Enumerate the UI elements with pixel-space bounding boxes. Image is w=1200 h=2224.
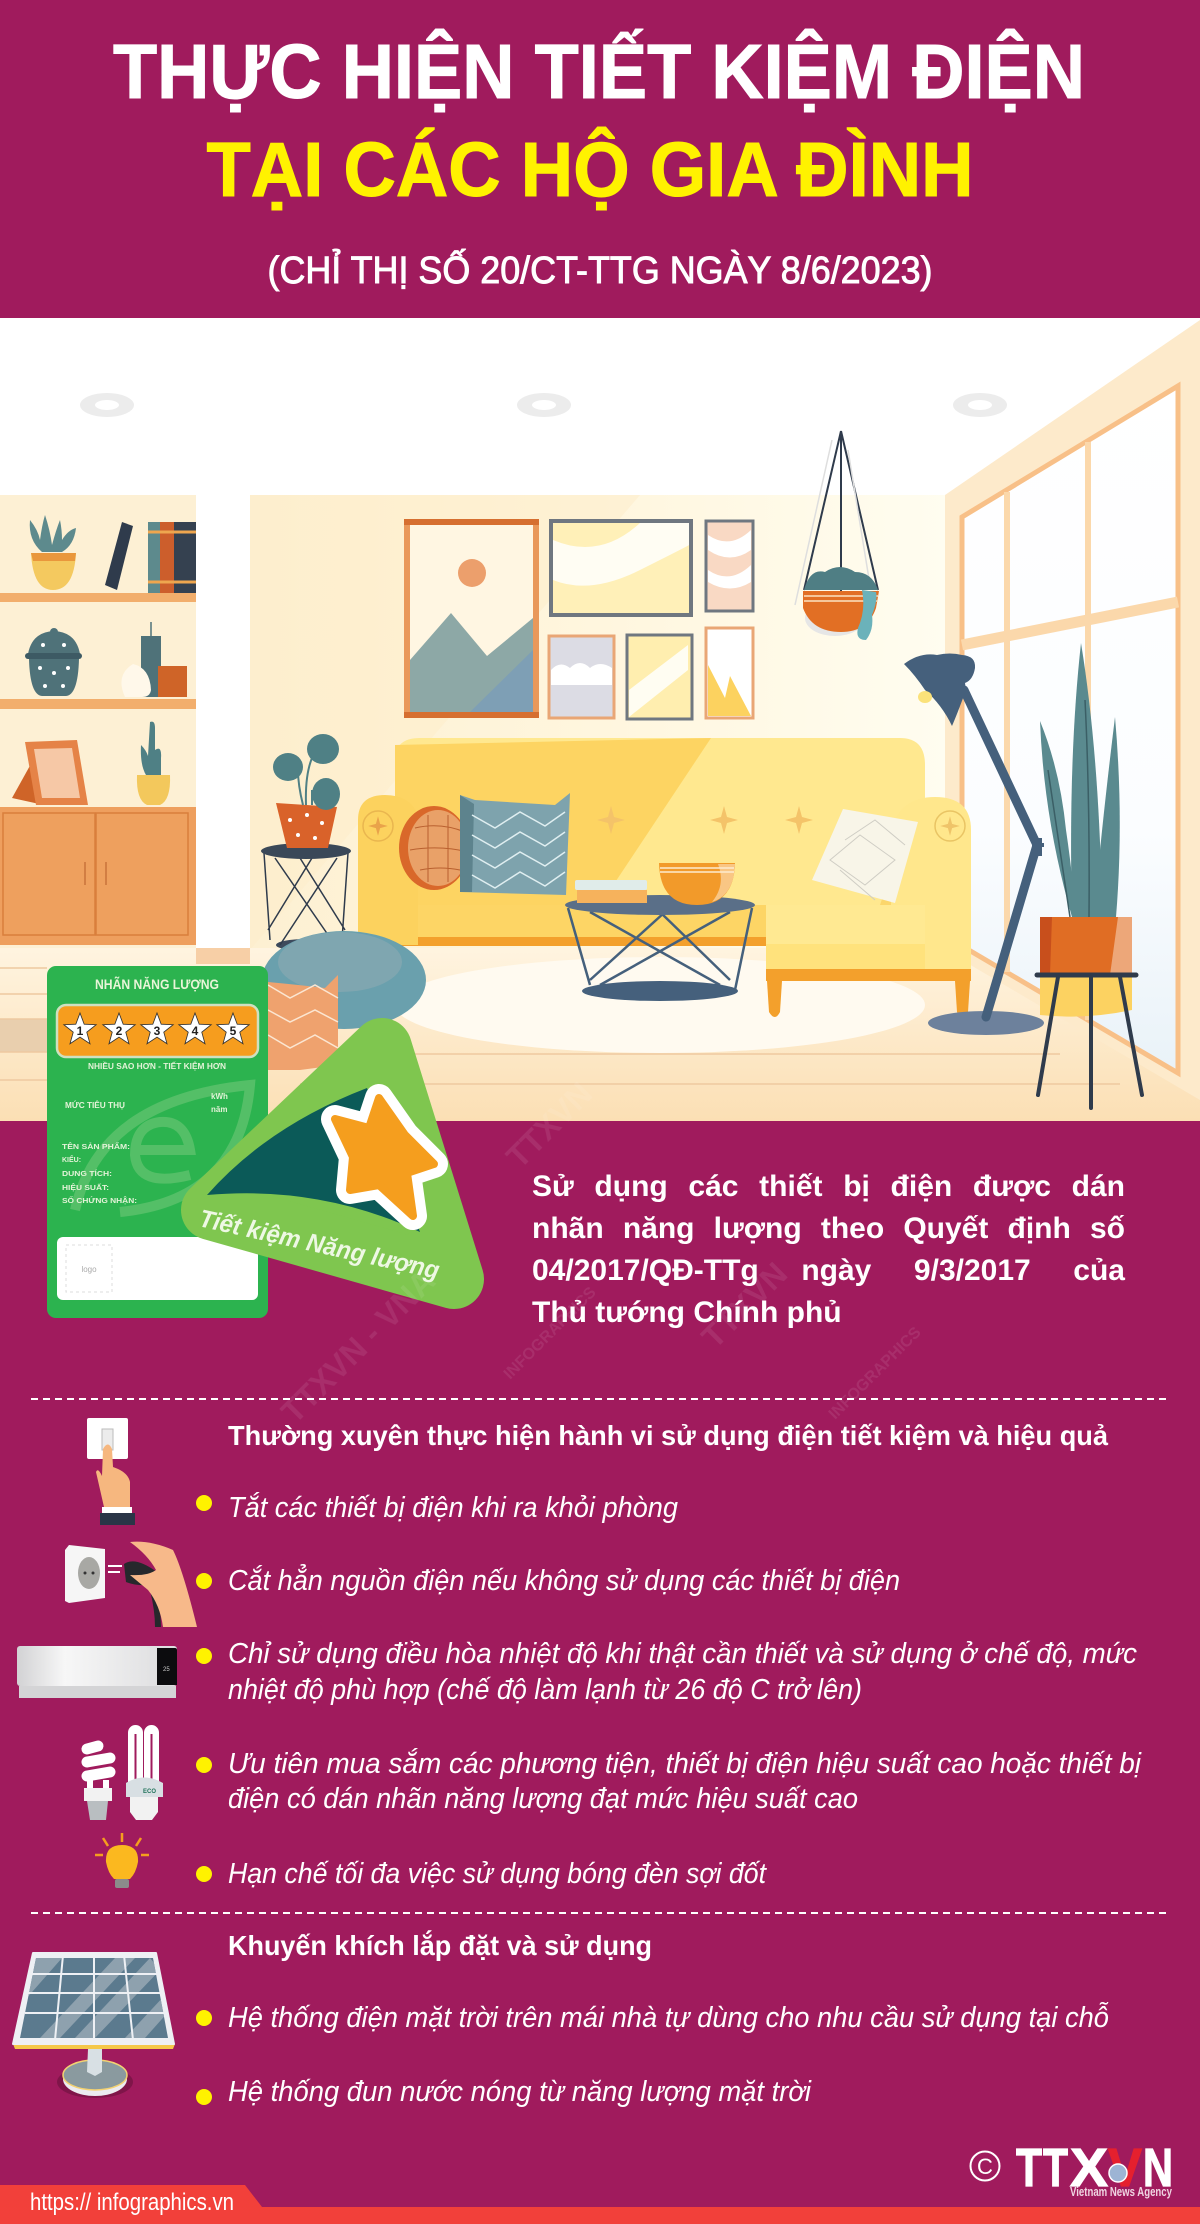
watermarks: TTXVN [499, 1075, 599, 1175]
plant pot [276, 803, 337, 848]
e logo watermark [75, 1085, 250, 1212]
cactus [137, 722, 170, 805]
TTXVN logo: N [1143, 2138, 1173, 2198]
star rating bar: 1 [77, 1024, 84, 1038]
TTXVN logo: T [1016, 2138, 1042, 2198]
label details: DUNG TÍCH: [62, 1169, 112, 1178]
swoosh [207, 1088, 420, 1232]
title line 1: THỰC HIỆN TIẾT KIỆM ĐIỆN [113, 28, 1085, 115]
plant leaves [1040, 643, 1120, 917]
cabinet [0, 807, 196, 945]
label details: NHIỀU SAO HƠN - TIẾT KIỆM HƠN [88, 1061, 226, 1071]
rug [395, 957, 925, 1053]
item: Tắt các thiết bị điện khi ra khỏi phòng [228, 1491, 678, 1524]
candles and vase [121, 622, 187, 697]
bullet list [196, 1491, 1142, 1890]
label details: KIỂU: [62, 1155, 81, 1164]
section one [17, 1399, 1168, 1890]
energy label paragraph: Sử dụng các thiết bị điện được dán [532, 1170, 1125, 1203]
agency name: Vietnam News Agency [1070, 2185, 1172, 2199]
books [575, 880, 647, 903]
icon: incandescent bulb [95, 1833, 149, 1888]
label details [62, 1061, 228, 1205]
sofa chaise [766, 797, 971, 1017]
item: Hệ thống điện mặt trời trên mái nhà tự dùng cho nhu cầu sử dụng tại chỗ [228, 2001, 1109, 2034]
white pillow [812, 809, 918, 903]
copyright and logo [970, 2138, 1173, 2199]
star rating bar: 5 [230, 1024, 237, 1038]
item: Chỉ sử dụng điều hòa nhiệt độ khi thật cần thiết và sử dụng ở chế độ, mức [228, 1638, 1137, 1670]
watermarks: TTXVN [694, 1255, 794, 1355]
item: Hạn chế tối đa việc sử dụng bóng đèn sợi đốt [228, 1858, 768, 1890]
label details: năm [211, 1105, 227, 1114]
bullet list [196, 2001, 1109, 2108]
item [196, 1747, 1142, 1815]
copyright symbol [970, 2152, 1000, 2180]
url: https:// infographics.vn [30, 2189, 234, 2216]
watermarks: TTXVN - VNA [274, 1262, 442, 1430]
icon: socket and plug [65, 1542, 197, 1627]
bookshelf [0, 495, 250, 964]
pouf and pillow [262, 931, 426, 1070]
watermarks: INFOGRAPHICS [501, 1284, 600, 1383]
energy label paragraph [532, 1170, 1126, 1329]
right wall and window [945, 320, 1200, 1100]
label details: kWh [211, 1092, 228, 1101]
picture: abstract yellow [551, 521, 691, 615]
header panel [0, 0, 1200, 318]
picture: diagonal stripes [627, 635, 692, 719]
badge text: Tiết kiệm Năng lượng [197, 1205, 442, 1285]
icon: air conditioner: 25 [163, 1667, 170, 1673]
TTXVN logo: T [1043, 2138, 1068, 2198]
title line 2: TẠI CÁC HỘ GIA ĐÌNH [206, 126, 974, 213]
logo box: logo [81, 1265, 97, 1274]
item: điện có dán nhãn năng lượng đạt mức hiệu suất cao [228, 1783, 858, 1815]
item: Ưu tiên mua sắm các phương tiện, thiết bị điện hiệu suất cao hoặc thiết bị [228, 1747, 1142, 1780]
illustration: living room [0, 318, 1200, 1121]
blue pillow [460, 793, 570, 895]
picture: snow hills [549, 636, 614, 718]
coffee table [565, 863, 755, 1001]
wall [250, 495, 950, 950]
energy label paragraph: 04/2017/QĐ-TTg ngày 9/3/2017 của [532, 1254, 1125, 1287]
item: nhiệt độ phù hợp (chế độ làm lạnh từ 26 độ C trở lên) [228, 1674, 862, 1706]
heading: Khuyến khích lắp đặt và sử dụng [228, 1930, 652, 1961]
logo box [57, 1237, 258, 1300]
TTXVN logo: X [1070, 2138, 1108, 2198]
icon: air conditioner [17, 1646, 177, 1698]
U bulb: ECO [143, 1789, 156, 1795]
star [335, 1098, 434, 1216]
bowl [659, 863, 735, 905]
floor [0, 948, 1200, 1121]
copyright symbol: C [977, 2154, 993, 2179]
footer band [0, 2185, 1200, 2224]
item: Hệ thống đun nước nóng từ năng lượng mặt trời [228, 2076, 812, 2108]
picture: mountain [404, 519, 539, 718]
icon: energy-saving bulbs [84, 1725, 163, 1820]
label title: NHÃN NĂNG LƯỢNG [95, 975, 219, 992]
heading: Thường xuyên thực hiện hành vi sử dụng điện tiết kiệm và hiệu quả [228, 1420, 1108, 1451]
energy label paragraph: Thủ tướng Chính phủ [532, 1296, 842, 1329]
icon: solar panel [10, 1950, 180, 2098]
wall pictures [404, 519, 753, 719]
shelf plant [30, 515, 76, 590]
star rating bar: 3 [154, 1024, 161, 1038]
star rating bar: 2 [116, 1024, 123, 1038]
star rating bar: 4 [192, 1024, 199, 1038]
floor lamp [904, 654, 1044, 1035]
item [196, 1638, 1137, 1706]
spiral bulb [84, 1746, 112, 1820]
picture: pink waves [706, 521, 753, 611]
round pillow [399, 806, 469, 890]
TTXVN logo [1016, 2138, 1173, 2198]
watermarks: INFOGRAPHICS [826, 1324, 925, 1423]
section two [10, 1913, 1168, 2108]
sofa cushion diamonds [597, 806, 813, 834]
energy label paragraph: nhãn năng lượng theo Quyết định số [532, 1212, 1125, 1245]
ceiling lights [80, 393, 1007, 417]
watermarks [274, 1075, 925, 1430]
item: Cắt hẳn nguồn điện nếu không sử dụng các thiết bị điện [228, 1563, 900, 1597]
large potted plant on stool [1037, 643, 1142, 1108]
books [105, 522, 196, 593]
TTXVN logo: V [1108, 2138, 1142, 2198]
plant pot [1040, 917, 1132, 1017]
sofa [358, 738, 971, 1017]
pot with dots [25, 628, 82, 696]
icon: light switch and hand [87, 1418, 135, 1525]
energy label: green card [47, 966, 268, 1318]
hanging plant [795, 431, 879, 640]
label details: SỐ CHỨNG NHẬN: [62, 1195, 137, 1205]
label details: TÊN SẢN PHẨM: [62, 1142, 130, 1151]
star rating bar [57, 1005, 258, 1057]
energy saving triangle badge [197, 1048, 454, 1285]
picture: yellow peaks [706, 628, 753, 718]
label details: MỨC TIÊU THỤ [65, 1101, 125, 1110]
photo frame [12, 740, 88, 805]
subtitle: (CHỈ THỊ SỐ 20/CT-TTG NGÀY 8/6/2023) [268, 247, 932, 292]
label details: HIỆU SUẤT: [62, 1182, 109, 1192]
side table plant [261, 734, 351, 951]
stool [1037, 975, 1142, 1108]
plant leaves [273, 734, 340, 810]
